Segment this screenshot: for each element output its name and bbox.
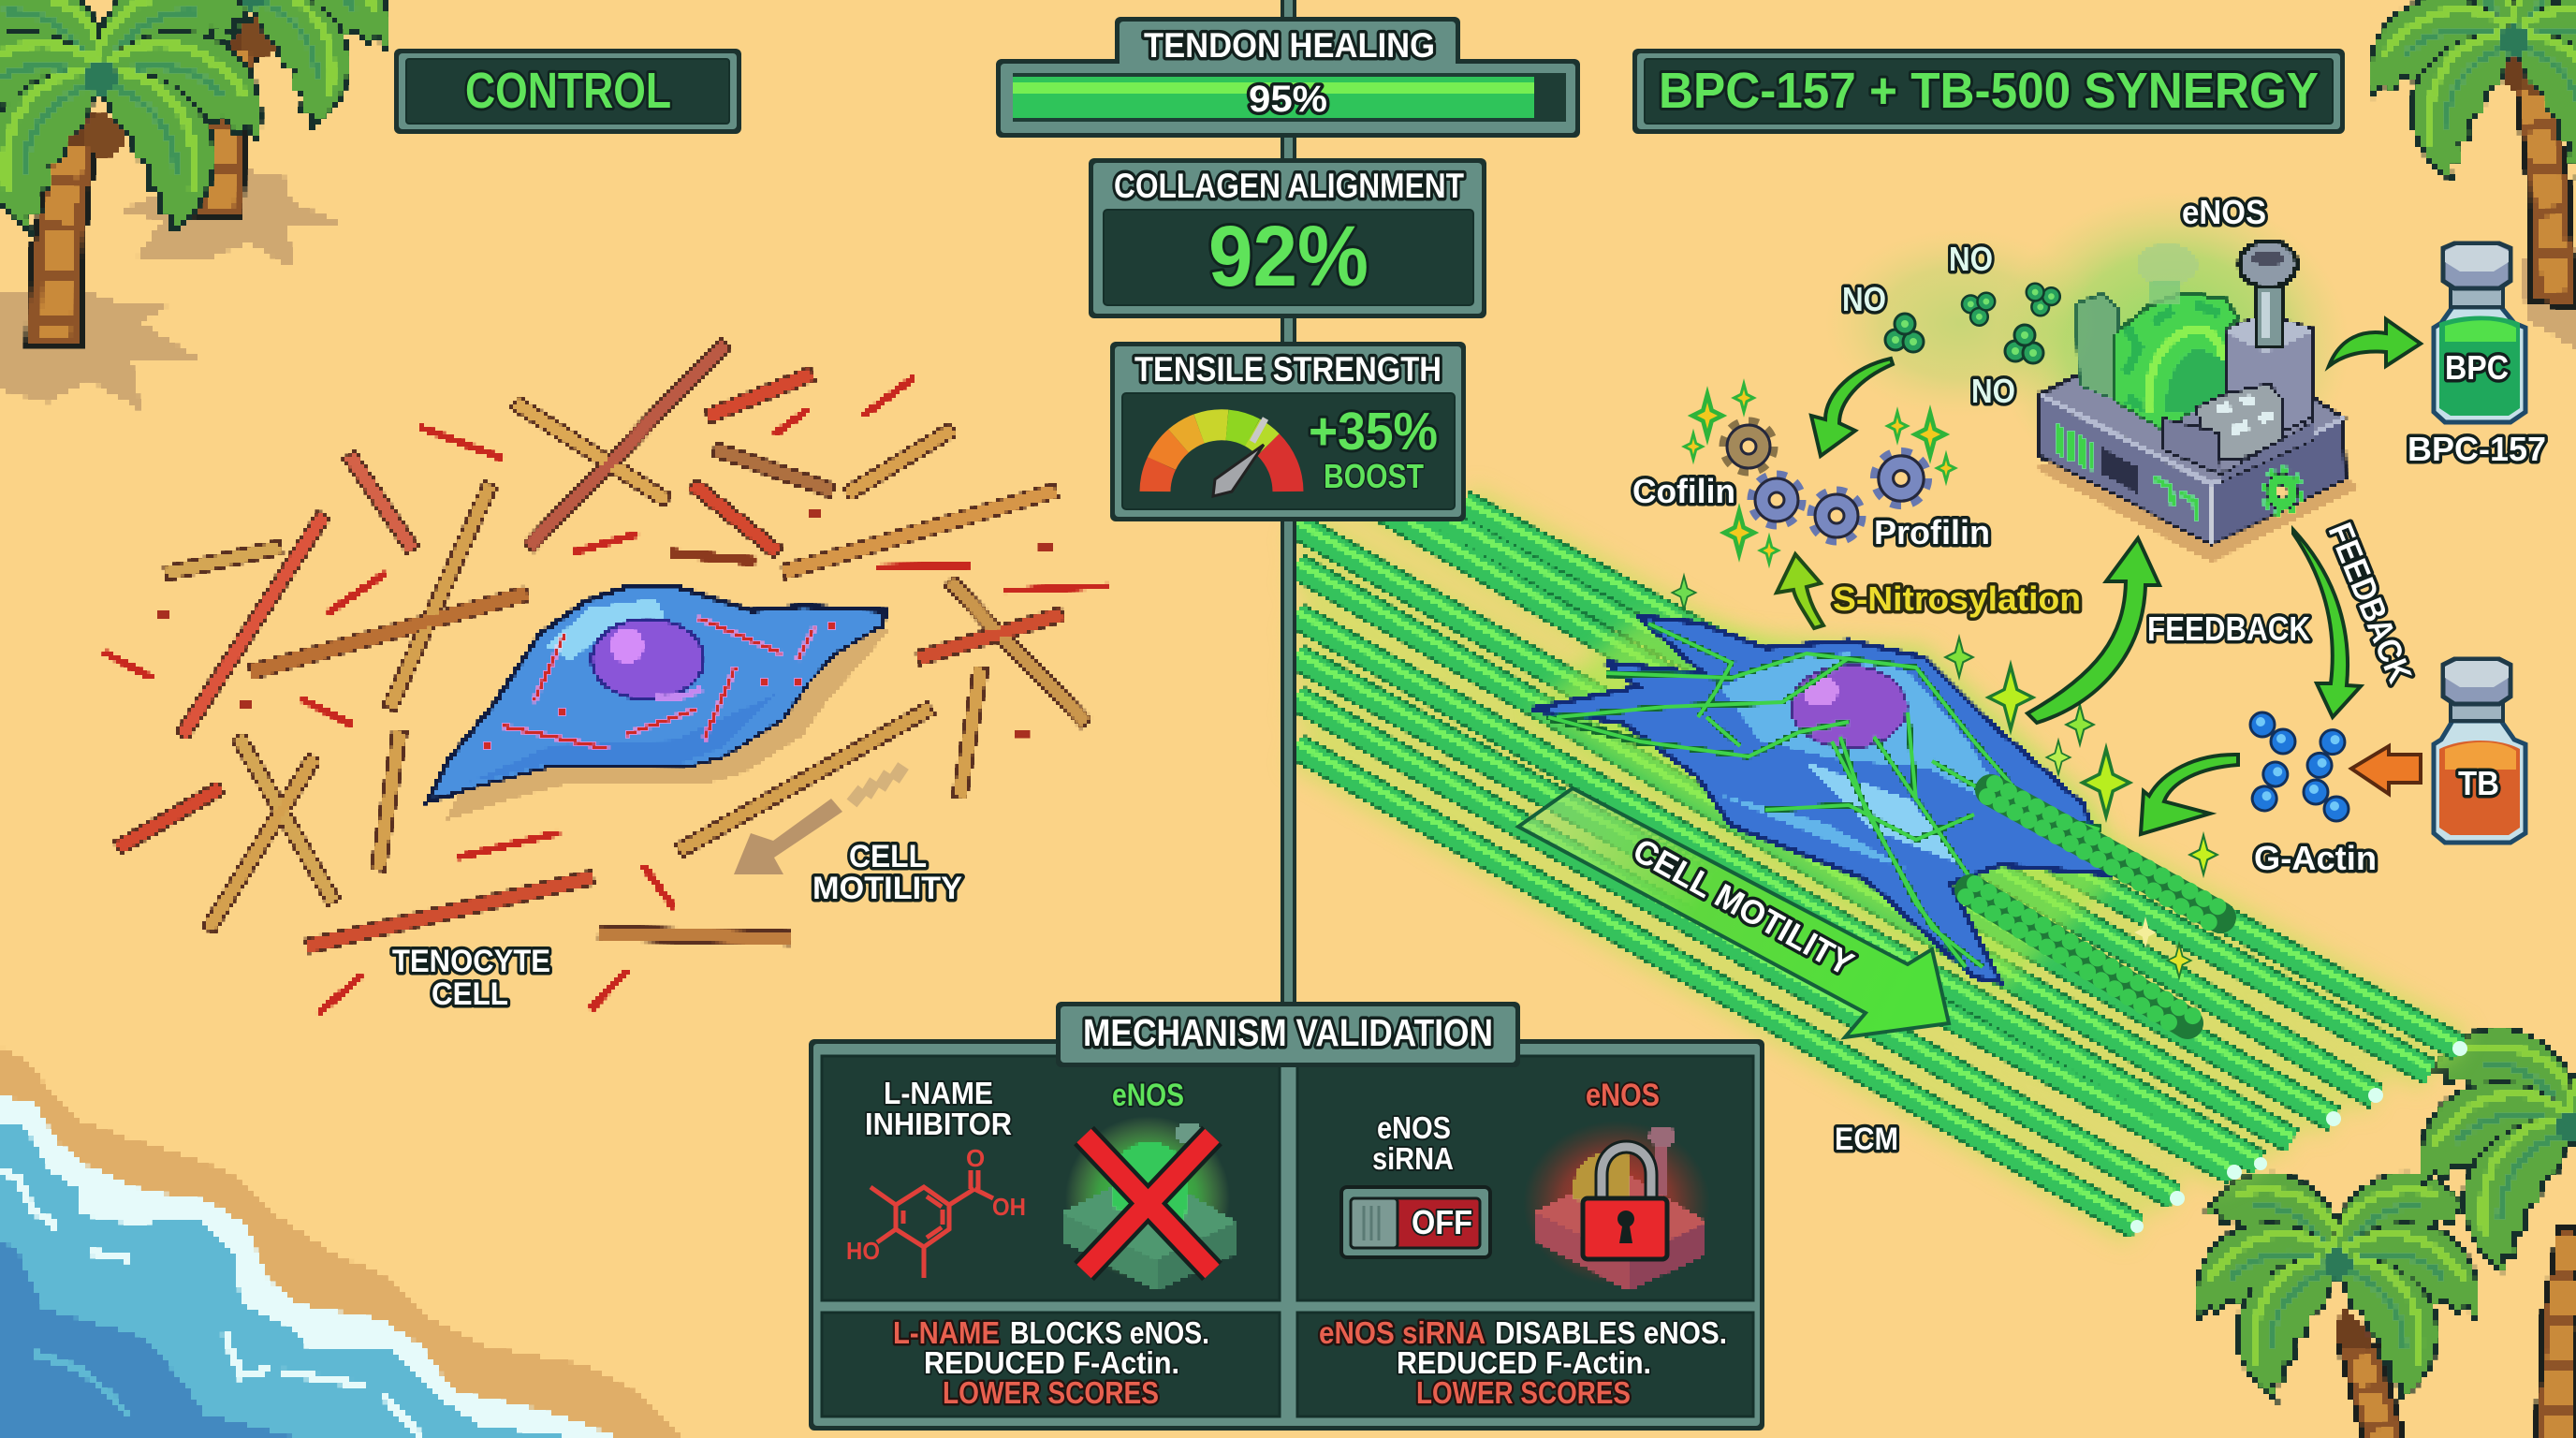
arrow: feedback to G-actin [2293, 530, 2361, 717]
label: cell motility, control: MOTILITY [812, 871, 962, 906]
title tab: mechanism validation [1056, 1002, 1520, 1067]
title tab: mechanism validation: MECHANISM VALIDATION [1083, 1011, 1493, 1054]
label: cell motility, treated: CELL MOTILITY [1627, 830, 1860, 983]
caption: L-NAME: REDUCED F-Actin. [924, 1345, 1179, 1380]
caption: L-NAME: BLOCKS eNOS. [1010, 1315, 1209, 1350]
label: collagen alignment: COLLAGEN ALIGNMENT [1114, 167, 1464, 205]
actin filament network [1548, 624, 2100, 967]
panel: collagen alignment [1089, 158, 1486, 318]
label: cell motility, control [812, 839, 962, 906]
label: tendon healing: TENDON HEALING [1144, 26, 1435, 65]
gears: cofilin and profilin [1724, 422, 1926, 540]
icon: molecule: HO [846, 1237, 880, 1265]
value: 92%: 92% [1208, 209, 1368, 304]
NO labels: NO [1949, 240, 1993, 278]
arrow: TB vial to G-actin [2351, 746, 2421, 794]
cell glow [1531, 617, 2115, 992]
caption: eNOS siRNA: LOWER SCORES [1416, 1375, 1631, 1410]
label: boost: BOOST [1324, 457, 1424, 495]
LED bars [2056, 423, 2095, 472]
NO labels [1842, 240, 2015, 410]
icon: molecule: OH [992, 1193, 1026, 1221]
label: L-NAME inhibitor: INHIBITOR [865, 1107, 1012, 1141]
label: BPC-157: BPC-157 [2408, 430, 2546, 468]
fiber glow [1297, 459, 2459, 1226]
palm tree: top right [2370, 0, 2576, 309]
header: control [394, 49, 741, 134]
icon: off switch [1341, 1187, 1490, 1257]
arrow: G-actin to filament [2141, 755, 2238, 834]
title: control: CONTROL [465, 63, 671, 119]
arrow: feedback to eNOS [2027, 538, 2159, 723]
tenocyte cell: control [429, 588, 889, 819]
tenocyte cell: treated [1531, 617, 2108, 981]
label: tensile strength: TENSILE STRENGTH [1134, 350, 1442, 389]
arrow: S-nitrosylation [1777, 554, 1823, 628]
arrow: eNOS to BPC vial [2329, 319, 2421, 366]
NO labels: NO [1842, 280, 1886, 318]
NO molecules [1885, 274, 2064, 363]
label: eNOS siRNA: siRNA [1372, 1141, 1454, 1176]
center connector [1281, 0, 1296, 1039]
icon: molecule: O [966, 1144, 985, 1172]
caption: L-NAME: LOWER SCORES [943, 1375, 1159, 1410]
palm tree: bottom right small [2197, 1146, 2478, 1438]
sparkles around gears [1684, 384, 1955, 564]
disorganized collagen fibers [107, 348, 1105, 1012]
header: synergy [1632, 49, 2345, 134]
progress bar [1013, 73, 1566, 122]
label: feedback, rotated: FEEDBACK [2321, 518, 2420, 688]
roller [2195, 384, 2284, 459]
fiber bodies [1297, 455, 2459, 1226]
label: eNOS red: eNOS [1586, 1078, 1660, 1113]
cell: L-NAME [822, 1056, 1280, 1300]
cell: eNOS siRNA [1297, 1056, 1753, 1300]
gear emblem [2264, 471, 2300, 512]
value: 95%: 95% [1249, 79, 1327, 120]
label: Profilin: Profilin [1874, 513, 1990, 551]
vial: BPC [2434, 243, 2525, 422]
caption: L-NAME [822, 1313, 1280, 1416]
label: eNOS siRNA [1372, 1110, 1454, 1176]
label: tenocyte cell: TENOCYTE [392, 944, 550, 979]
icon: blocked eNOS machine [1062, 1116, 1235, 1290]
fiber tips [2130, 1041, 2467, 1233]
label: eNOS green: eNOS [1112, 1078, 1184, 1113]
label: eNOS: eNOS [2182, 193, 2266, 231]
G-actin monomers [2245, 712, 2350, 821]
caption: eNOS siRNA [1297, 1313, 1753, 1416]
label: tenocyte cell: CELL [432, 976, 508, 1012]
label: ECM: ECM [1835, 1122, 1898, 1157]
title: synergy: BPC-157 + TB-500 SYNERGY [1659, 63, 2319, 119]
caption: L-NAME: L-NAME [893, 1315, 1000, 1350]
F-actin bead chain: lower [1966, 884, 2194, 1030]
arrow: NO to gears [1811, 359, 1893, 456]
F-actin bead chain: upper [1987, 784, 2226, 925]
eNOS machine [2036, 242, 2359, 562]
palm tree: top left front [0, 0, 260, 344]
palm shadows [0, 170, 2576, 409]
sparkles around treated cell [1672, 576, 2217, 977]
arrow: cell motility, treated [1518, 788, 1949, 1037]
aligned collagen fibers: ECM [1297, 455, 2467, 1233]
panel: tensile strength [1110, 342, 1466, 521]
arrow: faded cell motility, control [734, 766, 903, 874]
panel: mechanism validation [809, 1002, 1764, 1431]
label: feedback, horizontal: FEEDBACK [2147, 609, 2310, 648]
NO molecule glow [1825, 229, 2097, 417]
palm tree: top left back [113, 0, 388, 215]
actin filament highlights [1548, 624, 2100, 967]
icon: locked eNOS machine [1523, 1121, 1710, 1290]
vial: TB [2434, 659, 2525, 843]
label: tenocyte cell [392, 944, 550, 1012]
icon: off switch: OFF [1412, 1203, 1472, 1241]
palm tree: bottom right large [2421, 999, 2576, 1438]
panel: tendon healing [996, 17, 1580, 138]
left reactor tower [2076, 295, 2117, 400]
caption: eNOS siRNA: DISABLES eNOS. [1495, 1315, 1727, 1350]
label: eNOS siRNA: eNOS [1377, 1110, 1451, 1145]
label: TB in vial: TB [2458, 764, 2499, 802]
machine glow [1994, 192, 2349, 501]
caption: eNOS siRNA: REDUCED F-Actin. [1397, 1345, 1651, 1380]
value: +35%: +35% [1309, 402, 1438, 462]
stack tower [2225, 315, 2314, 440]
label: BPC in vial: BPC [2445, 348, 2509, 387]
label: L-NAME inhibitor [865, 1076, 1012, 1141]
beach shoreline [0, 1047, 683, 1438]
label: Cofilin: Cofilin [1632, 472, 1735, 510]
label: L-NAME inhibitor: L-NAME [884, 1076, 993, 1110]
caption: eNOS siRNA: eNOS siRNA [1319, 1315, 1486, 1350]
icon: molecule [846, 1144, 1026, 1278]
label: cell motility, control: CELL [849, 839, 927, 874]
label: G-Actin: G-Actin [2254, 839, 2377, 877]
NO labels: NO [1971, 372, 2015, 410]
gauge [1155, 418, 1288, 496]
green reactor dome [2113, 293, 2237, 431]
label: S-Nitrosylation: S-Nitrosylation [1833, 580, 2081, 618]
